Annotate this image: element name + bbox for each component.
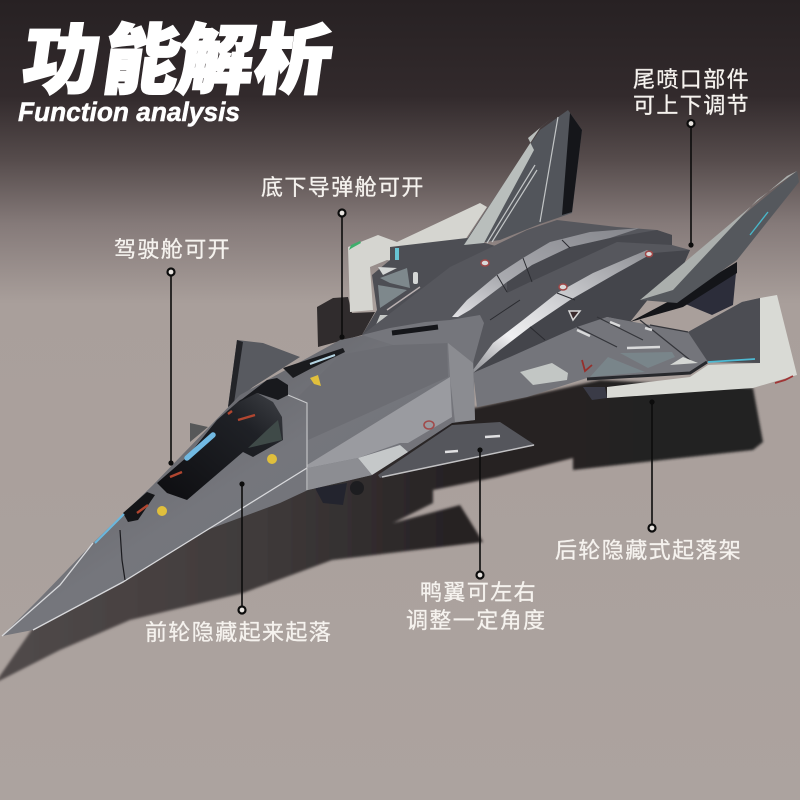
front gear leader line xyxy=(241,484,243,606)
cockpit text: 驾驶舱可开 xyxy=(114,237,231,262)
tail light band xyxy=(640,171,797,300)
callout: rear gear xyxy=(555,399,742,563)
front gear text: 前轮隐藏起来起落 xyxy=(145,620,332,645)
top intake block xyxy=(362,315,484,363)
far wing white pill xyxy=(413,272,418,284)
far wing lower tile xyxy=(373,315,407,332)
red ring markers xyxy=(481,251,652,290)
canopy frame xyxy=(157,393,283,500)
missile bay ring xyxy=(338,210,346,216)
ground shadow xyxy=(0,380,763,683)
canard text line 1: 鸭翼可左右 xyxy=(420,580,537,605)
nozzle text: 尾喷口部件 xyxy=(633,67,750,92)
tail pinstripes xyxy=(487,117,558,243)
rear gear ring xyxy=(648,524,656,532)
canard decals xyxy=(445,436,500,452)
canard ring xyxy=(476,572,484,578)
callout: missile bay xyxy=(261,175,425,340)
landing gear xyxy=(315,481,364,505)
front blue line xyxy=(95,514,124,543)
fuselage body xyxy=(362,220,690,373)
front yellow marker xyxy=(157,506,167,516)
intake grille xyxy=(392,327,438,333)
far wing cyan tag xyxy=(395,248,399,260)
white chine edge xyxy=(2,468,307,636)
far wing white tile xyxy=(378,267,397,275)
far wing diagonal line xyxy=(387,287,420,310)
wing cyan stripe xyxy=(708,359,755,362)
jet model xyxy=(2,110,799,636)
cockpit leader line xyxy=(170,276,172,463)
lower strake highlight xyxy=(473,250,653,373)
gear wheel xyxy=(350,481,364,495)
tail fin surface xyxy=(463,110,582,245)
canard lit edge xyxy=(382,445,534,477)
canard end dot xyxy=(477,447,483,453)
missile bay leader line xyxy=(341,217,343,337)
callout: front gear xyxy=(145,481,332,645)
tail fin body xyxy=(640,171,799,303)
subtitle: Function analysis xyxy=(18,97,240,127)
lower strake panel xyxy=(308,458,372,490)
blue canopy strip xyxy=(187,435,213,458)
yellow markers xyxy=(157,375,321,516)
canard surface xyxy=(378,422,535,478)
rear fuselage xyxy=(362,220,690,373)
nose body xyxy=(2,325,475,636)
right vertical tail xyxy=(630,171,799,322)
front red detail xyxy=(137,505,148,513)
small rear block xyxy=(190,423,208,442)
light strake panel xyxy=(307,377,452,468)
cockpit end dot xyxy=(168,460,174,466)
tail cyan accent xyxy=(750,212,768,235)
left canard xyxy=(190,340,300,442)
front gear ring xyxy=(238,606,246,614)
nozzle leader ring xyxy=(688,120,694,127)
forward fuselage and nose xyxy=(2,315,484,636)
cockpit ring xyxy=(168,268,174,276)
panel seam right of cockpit xyxy=(288,395,307,490)
tail dark edge xyxy=(562,113,582,215)
right canard xyxy=(378,422,535,478)
canard leader line xyxy=(479,450,481,571)
wing grey surface xyxy=(473,298,760,407)
rear gear leader line xyxy=(651,402,653,524)
lower white strake tile xyxy=(358,445,408,475)
tail dark underside xyxy=(630,262,737,322)
canard dark edge xyxy=(228,340,243,407)
rear gear text: 后轮隐藏式起落架 xyxy=(555,538,742,563)
shadow behind far wing xyxy=(317,297,375,347)
missile bay end dot xyxy=(339,334,345,340)
wing outer dark panel xyxy=(688,298,760,363)
wing white frame xyxy=(607,295,797,398)
under wing dark mount xyxy=(583,387,607,400)
wing white decals xyxy=(577,322,660,348)
wing window left xyxy=(590,357,645,377)
triangle marker xyxy=(569,311,580,320)
callout: cockpit xyxy=(114,237,231,466)
wing window right xyxy=(620,352,675,368)
front gear end dot xyxy=(239,481,245,487)
canard text line 2: 调整一定角度 xyxy=(406,608,546,633)
spine block xyxy=(448,343,475,422)
missile bay text: 底下导弹舱可开 xyxy=(261,175,425,200)
tail support bracket xyxy=(683,262,737,315)
red ring decal xyxy=(424,421,434,429)
far wing green marker xyxy=(349,241,361,250)
side yellow marker xyxy=(267,454,277,464)
front sensor bay xyxy=(123,492,155,522)
wing front white tile xyxy=(520,363,568,385)
wing white tile right xyxy=(670,357,698,365)
wing dark trailing edge xyxy=(587,362,707,379)
canopy rear hood xyxy=(237,378,288,403)
red canopy details xyxy=(170,411,255,477)
wing tip red edge xyxy=(775,376,793,383)
nozzle text line 2: 可上下调节 xyxy=(633,93,750,118)
callout: canard xyxy=(406,447,546,633)
canopy glass xyxy=(248,420,282,448)
callout: nozzle xyxy=(633,67,750,248)
rear gear end dot xyxy=(649,399,655,405)
rear yellow marker xyxy=(310,375,321,386)
upper strake highlight xyxy=(452,228,640,317)
title: 功能解析 xyxy=(18,19,337,104)
red chevron marker xyxy=(582,360,592,371)
rear blue strip xyxy=(310,355,335,364)
gear door xyxy=(315,483,347,505)
nozzle leader end dot xyxy=(688,242,694,248)
panel lines xyxy=(490,240,575,340)
far wing white panels xyxy=(348,203,487,312)
dark upper flank xyxy=(507,230,672,293)
left vertical tail xyxy=(463,110,582,245)
nose seam line xyxy=(120,530,125,580)
rear dark bay xyxy=(283,348,345,378)
dark lower flank xyxy=(473,250,690,373)
far canard panel xyxy=(228,340,300,407)
cockpit canopy xyxy=(95,348,345,543)
nozzle leader line xyxy=(690,127,692,245)
far wing grey surface xyxy=(362,238,510,345)
upper fuselage dark panel xyxy=(298,343,448,440)
wing panel lines xyxy=(577,317,690,360)
far wing window lower xyxy=(378,285,407,308)
far wing window upper xyxy=(380,268,410,288)
tail light stripe xyxy=(464,117,553,245)
main near wing xyxy=(473,262,797,407)
